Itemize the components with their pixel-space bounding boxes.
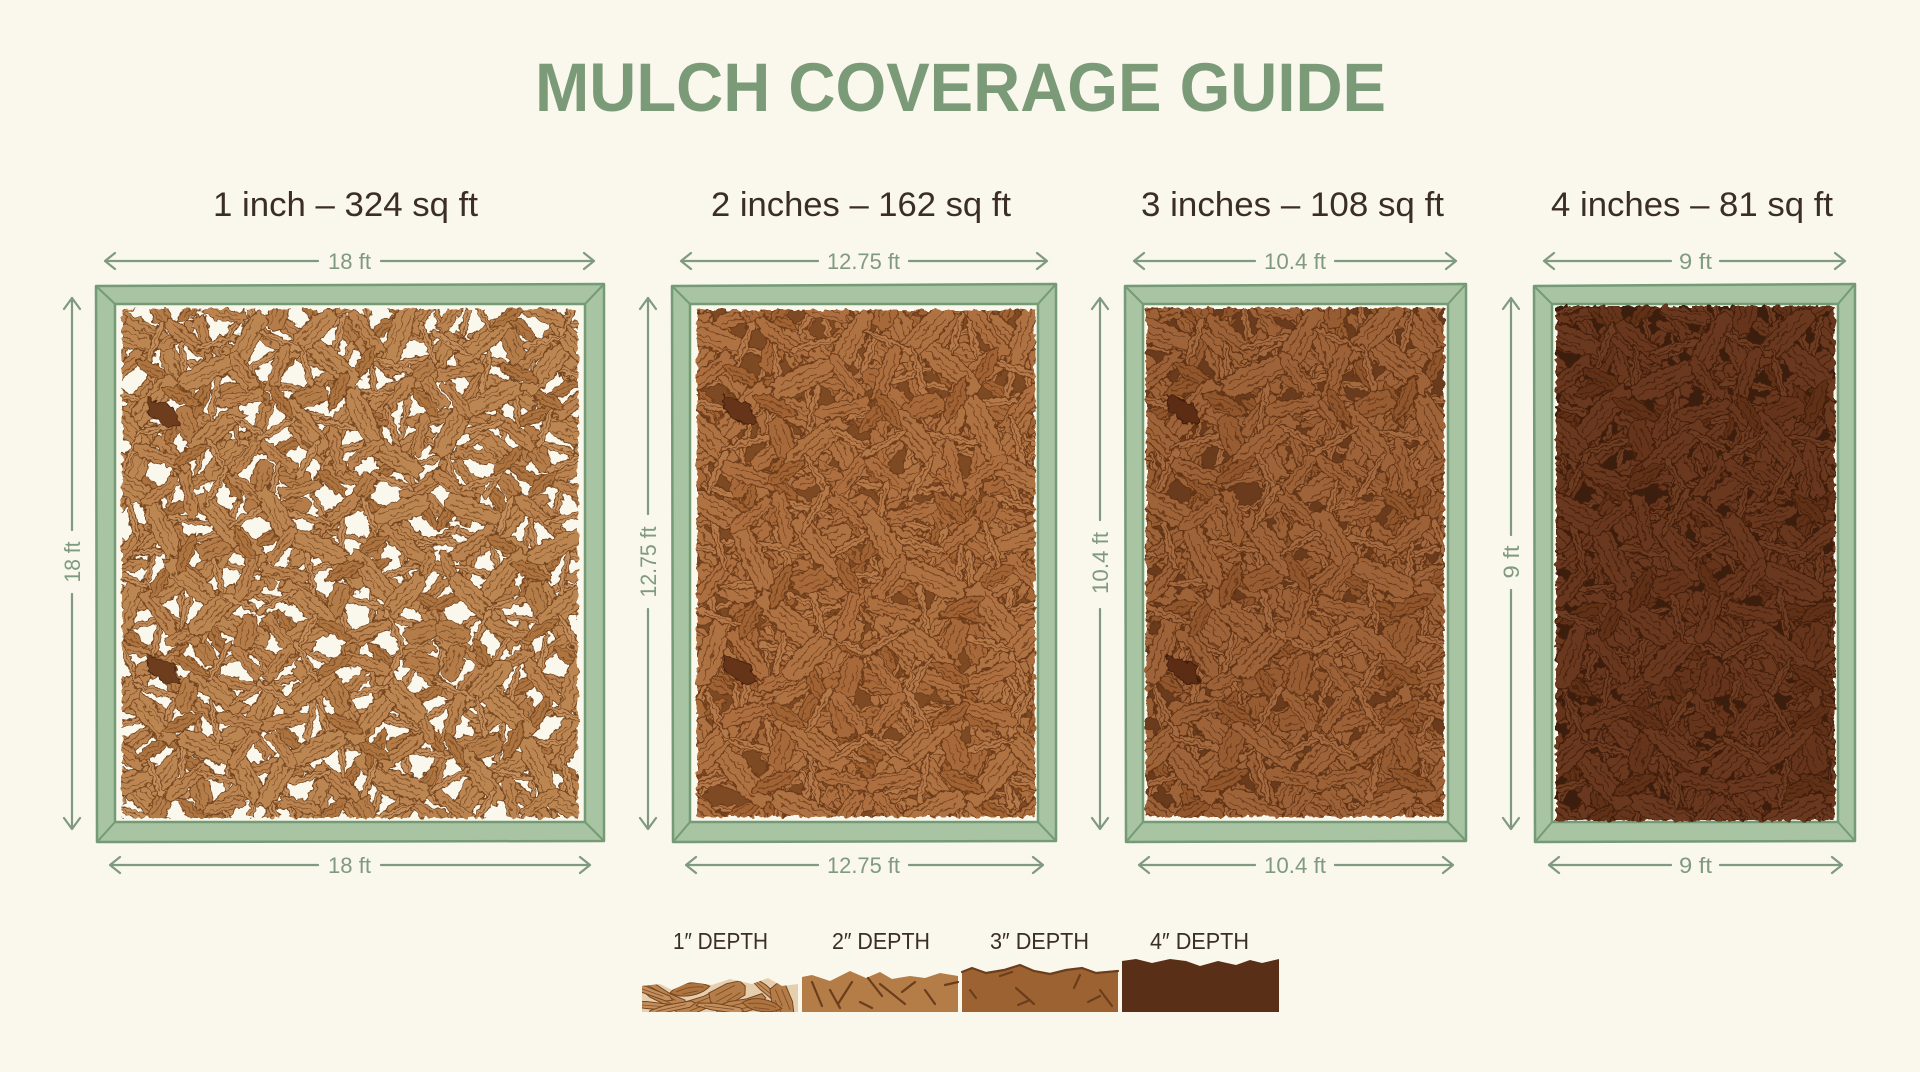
swatch: 2 inch depth [802,971,958,1012]
bottom width arrow [686,857,1043,873]
heading: 4 inches: 4 inches – 81 sq ft [1551,186,1834,224]
legend label 1: 1″ DEPTH [673,928,768,954]
top width arrow [105,253,594,269]
frame [96,284,604,842]
left height arrow [1503,298,1519,829]
left height label: 10.4 ft [1088,532,1113,594]
top width arrow [1134,253,1456,269]
mulch bed: denser chips [1144,306,1446,819]
panel: 3 inches [1090,191,1810,874]
top width label: 18 ft [328,249,371,274]
legend label 4: 4″ DEPTH [1150,928,1249,954]
bottom width label: 9 ft [1679,853,1712,878]
title: MULCH COVERAGE GUIDE [535,49,1386,126]
left height label: 9 ft [1499,546,1524,578]
top width label: 12.75 ft [827,249,900,274]
frame [1125,284,1466,842]
top width arrow [1544,253,1845,269]
frame [1534,284,1855,842]
legend label 2: 2″ DEPTH [832,928,930,954]
left height label: 18 ft [60,542,85,582]
bottom width arrow [110,857,590,873]
left height label: 12.75 ft [636,526,661,598]
bottom width arrow [1549,857,1842,873]
bottom width label: 12.75 ft [827,853,900,878]
frame [672,284,1056,842]
mulch bed: sparse chips [120,307,580,820]
panel: 4 inches [1502,191,1856,874]
legend label 3: 3″ DEPTH [990,928,1089,954]
swatch: 3 inch depth [962,965,1118,1012]
bottom width label: 10.4 ft [1264,853,1326,878]
top width label: 9 ft [1679,249,1712,274]
swatch: 1 inch depth [642,978,798,1012]
left height arrow [640,298,656,829]
left height arrow [1092,298,1108,829]
bottom width arrow [1139,857,1453,873]
left height arrow [64,298,80,829]
depth legend [642,933,1279,1012]
panel: 1 inch [60,186,644,878]
heading: 2 inches: 2 inches – 162 sq ft [711,186,1012,224]
heading: 3 inches: 3 inches – 108 sq ft [1141,186,1445,224]
bottom width label: 18 ft [328,853,371,878]
top width arrow [681,253,1047,269]
mulch bed: dense chips [695,308,1037,819]
panel: 2 inches [636,186,1299,1022]
swatch: 4 inch depth [1122,959,1279,1012]
heading: 1 inch: 1 inch – 324 sq ft [213,186,479,224]
top width label: 10.4 ft [1264,249,1326,274]
mulch bed: darkest chips [1554,304,1837,822]
